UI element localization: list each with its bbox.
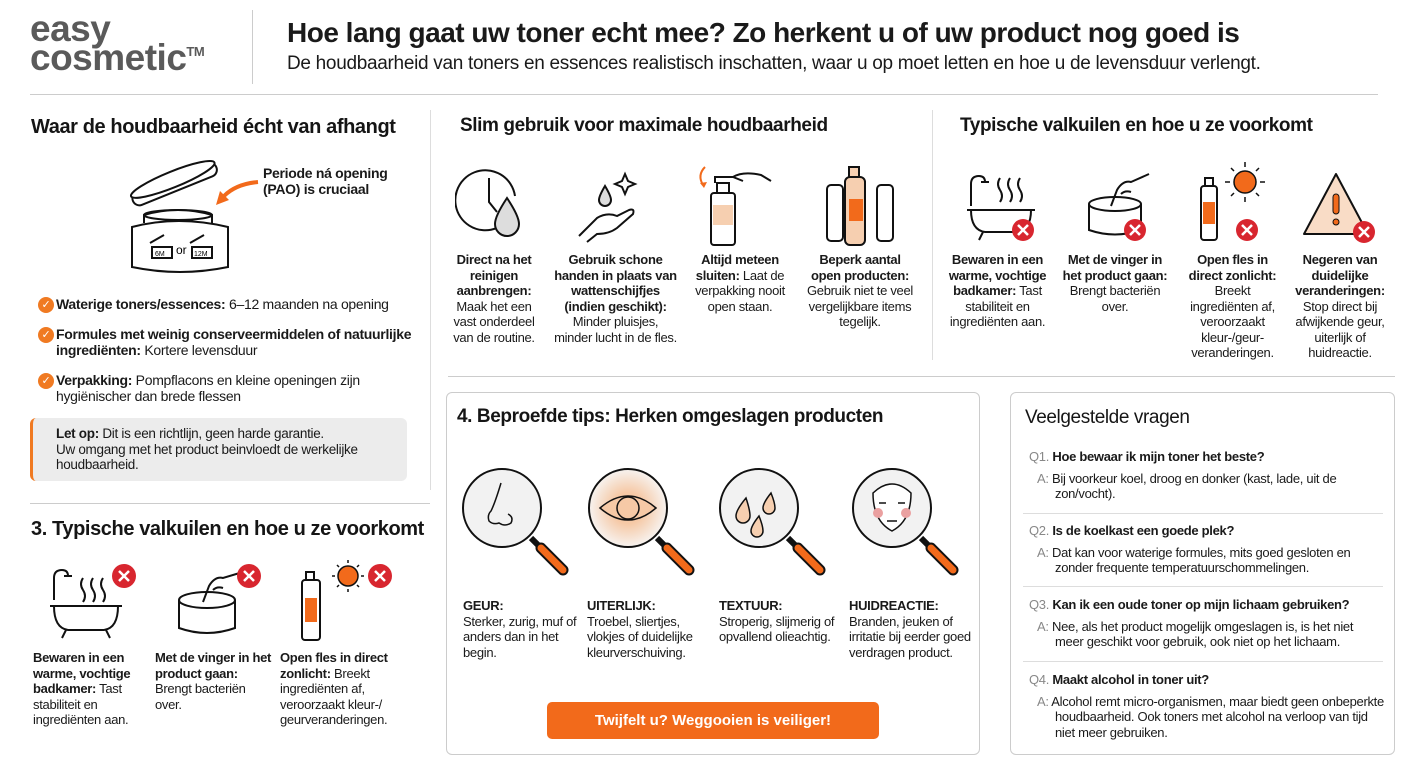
icon: clock drop (455, 169, 520, 237)
text: huidreactie: Branden, jeuken of irritatie bij eerder goed verdragen product. (849, 614, 971, 660)
Q4 (1029, 672, 1384, 740)
icon: bath (50, 564, 136, 638)
panel: houdbaarheid: Waterige toners/essences: 6–12 maanden na opening (56, 296, 389, 312)
heading: 4. Beproefde tips: Herken omgeslagen producten (457, 406, 883, 427)
icon: jar with PAO: 6M (155, 251, 165, 258)
logo (30, 8, 204, 78)
text: textuur: Stroperig, slijmerig of opvallend olieachtig. (719, 614, 834, 644)
Q2: Q2. Is de koelkast een goede plek? (1029, 523, 1234, 538)
Q3: Q3. Kan ik een oude toner op mijn lichaam gebruiken? (1029, 597, 1349, 612)
heading: Typische valkuilen en hoe u ze voorkomt (960, 115, 1313, 136)
text: zonlicht: Open fles in direct zonlicht: Breekt ingrediënten af, veroorzaakt kleur-/ geurveranderingen. (280, 650, 388, 727)
Q1: A: Bij voorkeur koel, droog en donker (kast, lade, uit de zon/vocht). (1037, 470, 1336, 501)
icon: jar with PAO (130, 160, 258, 273)
panel: valkuilen rechts (948, 115, 1385, 360)
text: vinger: Met de vinger in het product gaan: Brengt bacteriën over. (155, 650, 271, 712)
logo: cosmeticTM (30, 37, 204, 78)
heading: Waar de houdbaarheid écht van afhangt (31, 116, 396, 138)
panel: beproefde tips (446, 392, 980, 755)
panel: valkuilen rechts: Negeren van duidelijke veranderingen: Stop direct bij afwijkende geur, uiterlijk of huidreactie. (1295, 252, 1385, 360)
text: textuur (719, 598, 834, 644)
note box: Uw omgang met het product beinvloedt de werkelijke houdbaarheid. (56, 442, 358, 472)
text items: Direct na het reinigen aanbrengen: Maak het een vast onderdeel van de routine. (453, 252, 535, 344)
panel: valkuilen links (31, 518, 424, 727)
text: huidreactie: HUIDREACTIE: (849, 598, 939, 613)
text items: Bewaren in een warme, vochtige badkamer: Tast stabiliteit en ingrediënten aan. (949, 252, 1046, 329)
panel: slim gebruik (453, 115, 913, 344)
panel: houdbaarheid: Verpakking: Pompflacons en kleine openingen zijn hygiënischer dan brede flessen (56, 372, 360, 404)
icon: jar with PAO: 12M (194, 251, 208, 258)
note box: Let op: Dit is een richtlijn, geen harde garantie. (56, 426, 324, 441)
icon: jar with PAO: or (176, 243, 187, 257)
icon: finger in jar (178, 564, 261, 634)
panel: houdbaarheid: Formules met weinig conserveermiddelen of natuurlijke ingrediënten: Kortere levensduur (56, 326, 411, 358)
panel: slim gebruik: Altijd meteen sluiten: Laat de verpakking nooit open staan. (695, 252, 785, 314)
button (547, 702, 879, 739)
Q3 (1029, 597, 1354, 649)
button: Twijfelt u? Weggooien is veiliger! (595, 712, 831, 729)
logo: easy (30, 8, 110, 49)
Q2: A: Dat kan voor waterige formules, mits goed gesloten en zonder frequente temperatuurschommelingen. (1037, 544, 1350, 575)
icon: bath (967, 175, 1035, 241)
panel: valkuilen rechts: Met de vinger in het product gaan: Brengt bacteriën over. (1063, 252, 1167, 314)
callout: PAO: (PAO) is cruciaal (263, 181, 369, 197)
text: uiterlijk: Troebel, sliertjes, vlokjes of duidelijke kleurverschuiving. (587, 614, 693, 660)
icons: magnifiers (462, 468, 958, 576)
panel: houdbaarheid (30, 116, 412, 481)
icon: hands (578, 172, 638, 243)
text: badkamer: Bewaren in een warme, vochtige badkamer: Tast stabiliteit en ingrediënten aan. (33, 650, 130, 727)
Q2 (1029, 523, 1350, 575)
Q4: A: Alcohol remt micro-organismen, maar biedt geen onbeperkte houdbaarheid. Ook toners met alcohol na verloop van tijd niet meer gebruiken. (1037, 694, 1384, 740)
heading: Slim gebruik voor maximale houdbaarheid (460, 115, 828, 136)
panel: slim gebruik: Gebruik schone handen in plaats van wattenschijfjes (indien geschikt): Minder pluisjes, minder lucht in de fles. (554, 252, 677, 344)
icon: finger jar (1088, 173, 1150, 241)
text: geur: GEUR: (463, 598, 503, 613)
icon: bottle sun (1200, 162, 1265, 241)
panel: FAQ (1010, 392, 1395, 755)
icon: bottles (826, 166, 894, 246)
text: geur: Sterker, zurig, muf of anders dan in het begin. (463, 614, 576, 660)
icon: bottle in sun (301, 560, 392, 641)
note box (30, 418, 407, 481)
title: Hoe lang gaat uw toner echt mee? Zo herkent u of uw product nog goed is (287, 17, 1239, 48)
panel: slim gebruik: Beperk aantal open producten: Gebruik niet te veel vergelijkbare items tegelijk. (807, 252, 913, 329)
text: uiterlijk: UITERLIJK: (587, 598, 656, 613)
panel: valkuilen rechts: Open fles in direct zonlicht: Breekt ingrediënten af, veroorzaakt kleur-/geur-veranderingen. (1189, 252, 1276, 360)
Q3: A: Nee, als het product mogelijk omgeslagen is, is het niet meer geschikt voor gebruik, ook niet op het lichaam. (1037, 618, 1353, 649)
panel: houdbaarheid: ✓ (42, 299, 50, 311)
text: textuur: TEXTUUR: (719, 598, 782, 613)
Q4: Q4. Maakt alcohol in toner uit? (1029, 672, 1209, 687)
callout: PAO: Periode ná opening (263, 165, 388, 181)
bullet list (38, 296, 412, 404)
subtitle: De houdbaarheid van toners en essences realistisch inschatten, waar u op moet letten en hoe u de levensduur verlengt. (287, 53, 1261, 74)
panel: houdbaarheid: ✓ (42, 329, 50, 341)
Q1 (1029, 449, 1336, 501)
heading: Veelgestelde vragen (1025, 407, 1190, 428)
callout: PAO (263, 165, 388, 197)
icon: warning (1303, 173, 1375, 243)
icon: spray bottle (699, 166, 772, 246)
panel: houdbaarheid: ✓ (42, 375, 50, 387)
heading: 3. Typische valkuilen en hoe u ze voorkomt (31, 518, 424, 540)
Q1: Q1. Hoe bewaar ik mijn toner het beste? (1029, 449, 1264, 464)
